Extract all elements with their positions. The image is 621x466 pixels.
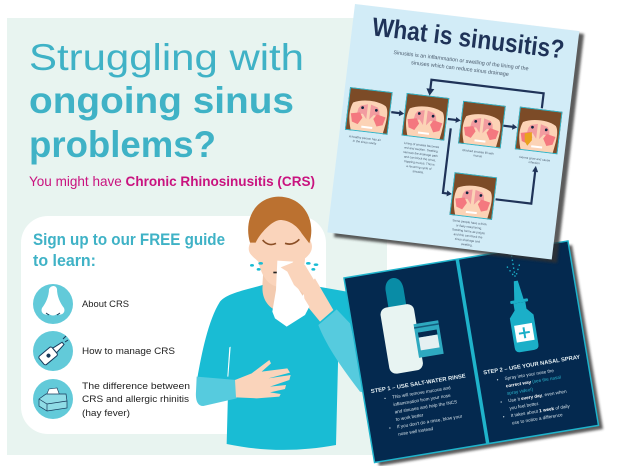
caption: face 1: in the sinus cavity — [352, 139, 377, 146]
icon: spray mist — [505, 254, 522, 278]
caption: face 2: and can block the sinus, — [404, 154, 436, 162]
face: swollen sinuses — [402, 93, 449, 141]
icon: nose — [33, 284, 73, 324]
text: step 2 bullets: • — [500, 399, 503, 405]
caption: face 1 — [348, 134, 381, 146]
right sleeve — [318, 309, 367, 393]
heading: sign up — [33, 231, 225, 270]
caption: face 5: and this can block the — [453, 232, 483, 240]
caption: face 3: mucus — [473, 153, 483, 158]
label: how to manage CRS: How to manage CRS — [82, 346, 175, 357]
nostril tear — [273, 272, 277, 273]
caption: face 2: sinusitis. — [412, 169, 424, 175]
text: step 1 bullets: • — [384, 396, 387, 401]
sneeze droplets right — [306, 262, 318, 271]
text: step 2 bullets: you feel better. — [509, 401, 540, 411]
shirt — [197, 285, 363, 450]
face — [249, 220, 312, 287]
text: step 2 bullets: use to notice a difference — [512, 412, 563, 425]
card: nasal rinse and spray steps — [344, 241, 603, 466]
closed eyes — [263, 239, 299, 244]
caption: face 4: infection — [528, 160, 540, 165]
face: healthy sinuses — [345, 87, 393, 135]
intro text: Sinusitis is an inflammation or swelling of the lining of the — [393, 50, 529, 72]
text: step 1 bullets: and sinuses and help the INCS — [394, 399, 457, 415]
text: step 1 bullets: • — [389, 425, 392, 431]
caption: face 2 — [401, 141, 440, 176]
text: step 2 bullets: Spray into your nose the — [504, 368, 555, 381]
heading: step 1: STEP 1 – USE SALT-WATER RINSE — [371, 373, 466, 395]
icon: nasal spray bottle — [504, 279, 539, 353]
tissue — [272, 261, 309, 327]
face: polyps — [449, 172, 497, 220]
left sleeve — [196, 377, 237, 406]
heading: step 2: STEP 2 – USE YOUR NASAL SPRAY — [483, 354, 581, 376]
right arm — [303, 278, 333, 322]
icon: nasal spray — [33, 331, 73, 371]
text: step 1 bullets: If you don't do a rinse, blow your — [397, 414, 463, 429]
caption: face 2: trapping mucus. This is — [404, 159, 435, 167]
text: difference between CRS and allergic rhinitis: (hay fever) — [82, 408, 130, 419]
text: step 2 bullets: spray video!) — [507, 387, 534, 396]
left hand — [235, 360, 291, 398]
intro text: sinuses which can reduce sinus drainage — [411, 60, 509, 78]
heading: sign up: Sign up to our FREE guide — [33, 231, 225, 249]
caption: face 2: Lining of sinuses becomes — [404, 141, 440, 149]
neck — [262, 270, 307, 313]
text: step 1 bullets: nose well instead — [398, 426, 434, 437]
title: What is sinusitis? — [371, 11, 566, 64]
caption: face 4: Germs grow and cause — [519, 155, 551, 163]
caption: face 3: Blocked sinuses fill with — [462, 148, 494, 156]
heading: sign up: to learn: — [33, 252, 96, 270]
text: step 1 bullets: inflammation from your nose — [393, 393, 451, 407]
caption: face 2: narrows the drainage path — [403, 150, 438, 158]
label: about CRS: About CRS — [82, 299, 129, 310]
heading: struggling with ongoing sinus problems: problems? — [29, 124, 216, 165]
caption: face 5: Some people have a thick — [452, 218, 487, 226]
caption: face 5: or flaky nasal lining. — [456, 223, 483, 230]
subheading: chronic rhinosinusitis: You might have Chronic Rhinosinusitis (CRS) — [29, 173, 315, 189]
fingers — [281, 262, 316, 295]
text: difference between CRS and allergic rhinitis — [82, 381, 190, 419]
caption: face 4 — [519, 155, 551, 167]
hair — [248, 197, 311, 243]
caption: face 1: A healthy person has air — [349, 134, 381, 142]
text: step 2 bullets: • — [502, 414, 505, 419]
caption: face 5 — [450, 218, 487, 249]
illustration: person blowing nose — [196, 197, 367, 450]
text: difference between CRS and allergic rhinitis: The difference between — [82, 381, 190, 392]
text: step 2 bullets — [496, 366, 572, 427]
icon: tissue box — [33, 379, 73, 419]
text: step 1 bullets: to work better — [395, 412, 424, 422]
sneeze droplets left — [250, 262, 263, 271]
heading: struggling with ongoing sinus problems: ongoing sinus — [29, 80, 294, 121]
text: difference between CRS and allergic rhinitis: CRS and allergic rhinitis — [82, 394, 189, 405]
heading: struggling with ongoing sinus problems — [29, 37, 304, 165]
caption: face 2: red and swollen. Swelling — [404, 145, 438, 154]
text: step 1 bullets: This will remove mucous and — [392, 385, 451, 400]
caption: face 3 — [462, 148, 494, 160]
icon: rinse packet — [413, 320, 444, 358]
caption: face 5: Swelling forms as polyps — [452, 227, 486, 235]
arrowheads — [390, 85, 547, 207]
text: step 2 bullets: correct way (see the nasal — [505, 374, 561, 388]
divider — [455, 259, 489, 444]
heading: struggling with ongoing sinus problems: Struggling with — [29, 37, 304, 78]
caption: face 5: swelling. — [461, 242, 473, 247]
text: step 2 bullets: It takes about 1 week of daily — [510, 403, 571, 418]
caption: face 2: a recurring cycle of — [406, 164, 432, 171]
face: infected sinus — [515, 107, 563, 154]
icon: salt water bottle — [375, 275, 424, 375]
flow arrows — [382, 75, 545, 204]
text: step 2 bullets: • — [496, 377, 499, 382]
text: step 2 bullets: Use it every day, even when — [508, 389, 567, 403]
text: step 1 bullets — [384, 384, 464, 438]
white gap beside torso — [227, 347, 231, 377]
card: what is sinusitis — [327, 4, 584, 263]
face: mucus builds — [458, 101, 506, 149]
panel: sign up card — [21, 216, 326, 434]
panel: pale green background — [7, 18, 387, 455]
caption: face 5: sinus drainage and — [455, 237, 481, 244]
